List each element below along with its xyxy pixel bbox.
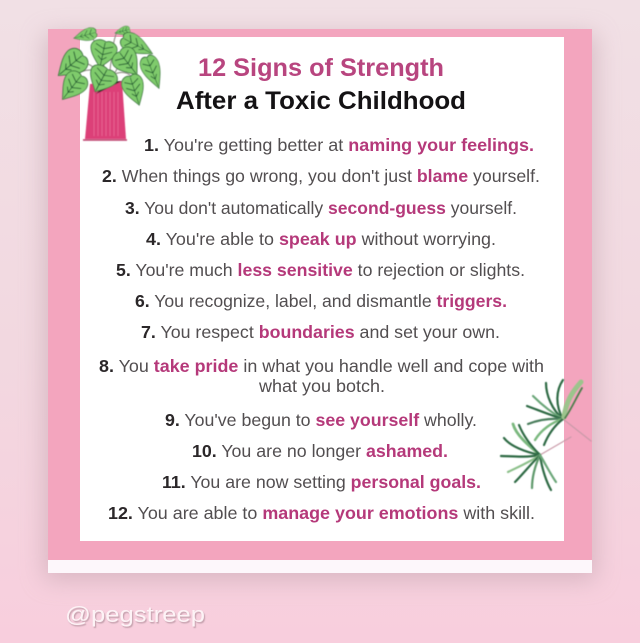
title bbox=[176, 54, 466, 115]
plant pot bbox=[83, 81, 127, 140]
sign 8: what you botch. bbox=[258, 376, 385, 396]
list of 12 signs bbox=[99, 135, 544, 523]
lower sprig bbox=[501, 424, 571, 490]
sign 10: 10. You are no longer ashamed. bbox=[192, 441, 448, 461]
sign 8 bbox=[99, 356, 544, 396]
sign 5: 5. You're much less sensitive to rejection or slights. bbox=[116, 260, 525, 280]
sign 12: 12. You are able to manage your emotions with skill. bbox=[108, 503, 535, 523]
handle: @pegstreep: @pegstreep bbox=[65, 602, 205, 627]
sign 11: 11. You are now setting personal goals. bbox=[162, 472, 481, 492]
card frame bbox=[48, 29, 592, 573]
sign 6: 6. You recognize, label, and dismantle triggers. bbox=[135, 291, 507, 311]
sign 3: 3. You don't automatically second-guess yourself. bbox=[125, 198, 517, 218]
card shadow bbox=[44, 34, 596, 580]
sign 9: 9. You've begun to see yourself wholly. bbox=[165, 410, 477, 430]
title: 12 Signs of Strength bbox=[198, 54, 444, 82]
icon: potted plant bbox=[50, 25, 168, 140]
icon: palm sprigs bbox=[501, 380, 591, 490]
sign 1: 1. You're getting better at naming your feelings. bbox=[144, 135, 534, 155]
title: After a Toxic Childhood bbox=[176, 87, 466, 115]
sign 4: 4. You're able to speak up without worrying. bbox=[146, 229, 496, 249]
upper sprig bbox=[527, 380, 591, 445]
white content panel bbox=[80, 37, 564, 541]
sign 7: 7. You respect boundaries and set your own. bbox=[141, 322, 500, 342]
plant stems bbox=[72, 30, 134, 84]
sign 8: 8. You take pride in what you handle well and cope with bbox=[99, 356, 544, 376]
plant leaves bbox=[50, 25, 168, 109]
sign 2: 2. When things go wrong, you don't just blame yourself. bbox=[102, 166, 540, 186]
